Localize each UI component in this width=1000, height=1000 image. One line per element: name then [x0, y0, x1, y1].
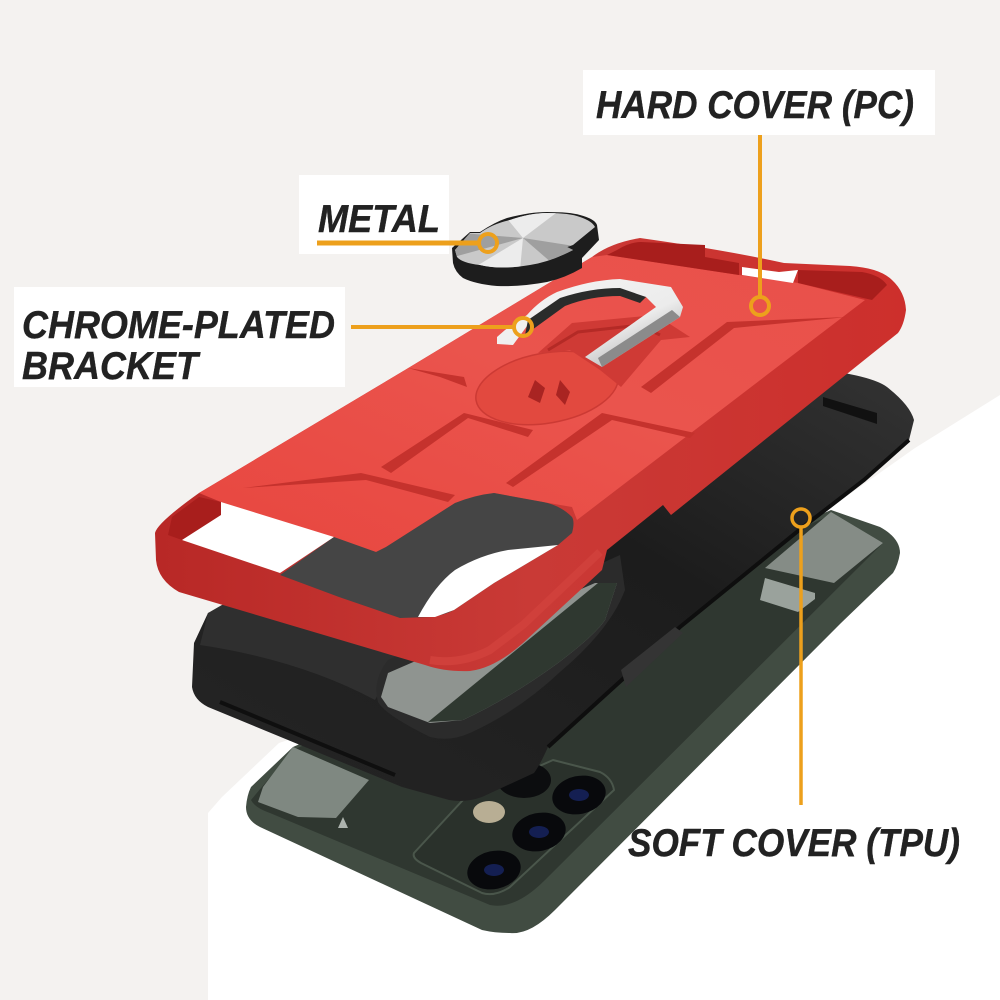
- leader: soft cover: [792, 509, 810, 805]
- label: chrome-plated bracket: CHROME-PLATED: [22, 304, 335, 347]
- lower rim highlight: [430, 552, 600, 661]
- label: metal: METAL: [318, 198, 440, 241]
- chrome-plated bracket: [497, 279, 683, 367]
- mount oval: [470, 341, 624, 435]
- light red face: [199, 255, 865, 552]
- camera lenses: [464, 762, 609, 894]
- dark inside face: [200, 560, 420, 700]
- leader: bracket: [351, 318, 532, 336]
- centre mount details: [528, 380, 570, 405]
- label: chrome-plated bracket: BRACKET: [22, 345, 201, 388]
- label: chrome-plated bracket: [14, 287, 345, 388]
- red outer shell: [155, 238, 906, 671]
- leader: hard cover: [751, 135, 769, 315]
- leader: metal: [317, 234, 497, 252]
- camera island: [414, 760, 614, 894]
- label: soft cover: SOFT COVER (TPU): [628, 822, 960, 865]
- panel ridges: [243, 317, 847, 502]
- window cut-outs: [182, 502, 334, 573]
- cover outer rim: [548, 440, 909, 747]
- label: metal: [299, 175, 449, 254]
- side button: [621, 627, 683, 687]
- metal ring holder: [450, 210, 600, 286]
- label: hard cover: HARD COVER (PC): [596, 84, 914, 127]
- soft TPU cover: [192, 372, 914, 801]
- label: hard cover: [583, 70, 935, 135]
- camera window: [376, 555, 625, 739]
- interior rim walls: [607, 242, 739, 275]
- glass reflections: [765, 512, 883, 583]
- hard PC cover: [155, 238, 906, 671]
- raised mount behind bracket: [538, 315, 690, 387]
- camera cut-out: [280, 493, 574, 618]
- phone: green back: [246, 510, 900, 933]
